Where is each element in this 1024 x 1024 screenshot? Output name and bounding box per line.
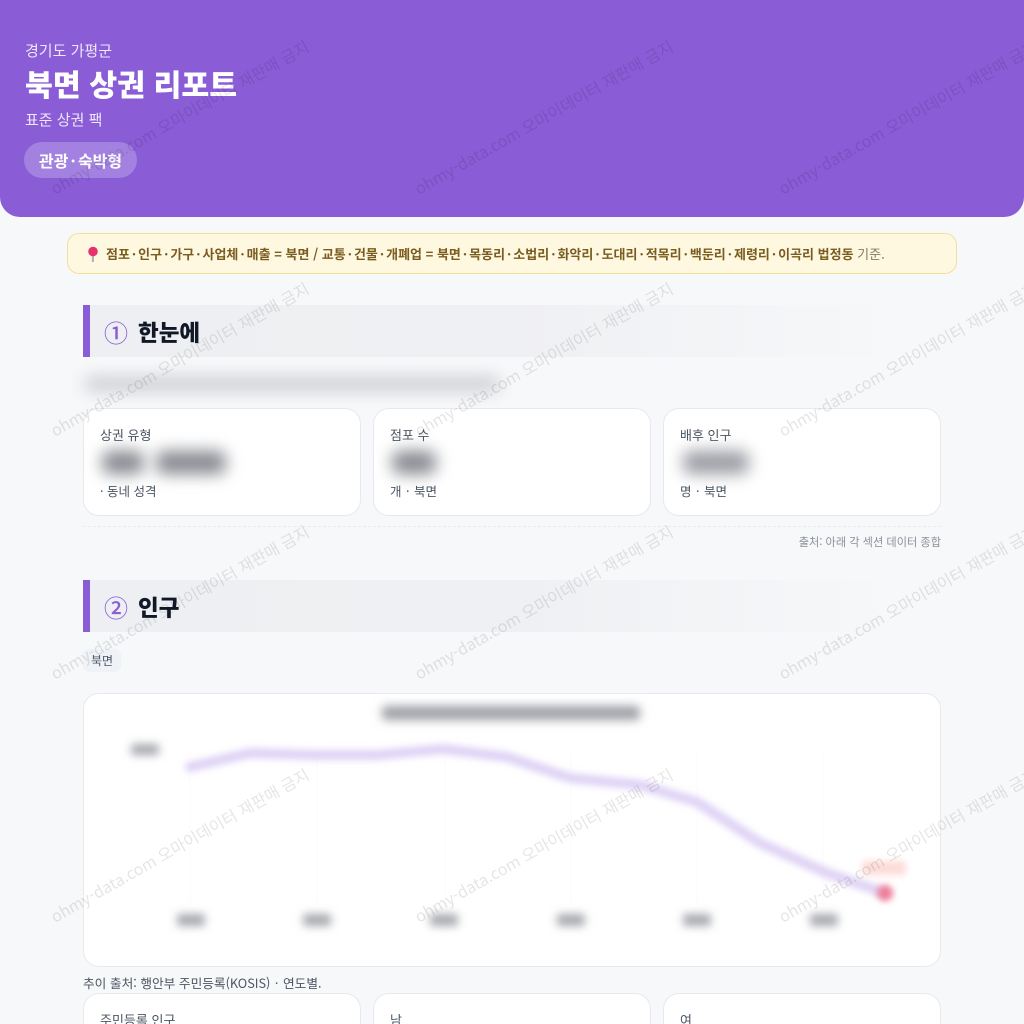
unit: · 동네 성격 bbox=[100, 481, 156, 500]
section number: ① bbox=[104, 314, 128, 349]
area tag: 북면 bbox=[91, 652, 113, 669]
section heading: 한눈에 bbox=[83, 305, 941, 357]
trend line bbox=[190, 749, 885, 893]
category pill: 관광·숙박형 bbox=[39, 148, 122, 172]
area tag bbox=[83, 649, 121, 672]
watermark overlay: ohmy-data.com 오마이데이터 재판매 금지 bbox=[410, 34, 677, 199]
x-axis labels (blurred) bbox=[177, 914, 838, 926]
section title: 인구 bbox=[138, 591, 179, 623]
KPI card: 배후 인구 bbox=[663, 408, 941, 516]
KPI card: 여 bbox=[663, 993, 941, 1024]
label: 상권 유형 bbox=[100, 425, 151, 444]
notice text: 점포·인구·가구·사업체·매출 = 북면 / 교통·건물·개폐업 = 북면·목동리·소법리·화악리·도대리·적목리·백둔리·제령리·이곡리 법정동 기준. bbox=[106, 244, 885, 263]
blurred value bbox=[92, 440, 236, 486]
region label: 경기도 가평군 bbox=[25, 40, 112, 61]
subtitle: 표준 상권 팩 bbox=[25, 109, 102, 130]
chart source: 추이 출처: 행안부 주민등록(KOSIS) · 연도별. bbox=[83, 973, 322, 992]
highlighted end point bbox=[877, 885, 893, 901]
watermark overlay: ohmy-data.com 오마이데이터 재판매 금지 bbox=[410, 762, 677, 927]
KPI card: 남 bbox=[373, 993, 651, 1024]
end point label bbox=[862, 861, 906, 875]
notice box bbox=[67, 233, 957, 274]
watermark overlay: ohmy-data.com 오마이데이터 재판매 금지 bbox=[46, 519, 313, 684]
label: 배후 인구 bbox=[680, 425, 731, 444]
category pill bbox=[24, 142, 137, 178]
watermark overlay: ohmy-data.com 오마이데이터 재판매 금지 bbox=[46, 276, 313, 441]
section title: 한눈에 bbox=[138, 316, 200, 348]
icon: location pin bbox=[88, 246, 98, 262]
blurred value bbox=[392, 451, 436, 474]
blurred summary text bbox=[84, 376, 500, 392]
chart title (blurred) bbox=[382, 706, 640, 720]
KPI card: 주민등록 인구 bbox=[83, 993, 361, 1024]
title: 북면 상권 리포트 bbox=[25, 61, 237, 105]
unit: 명 · 북면 bbox=[680, 481, 727, 500]
y-axis label (blurred) bbox=[131, 744, 159, 755]
blurred value bbox=[683, 451, 749, 474]
unit: 개 · 북면 bbox=[390, 481, 437, 500]
watermark overlay: ohmy-data.com 오마이데이터 재판매 금지 bbox=[46, 762, 313, 927]
section heading: 인구 bbox=[83, 580, 941, 632]
watermark overlay: ohmy-data.com 오마이데이터 재판매 금지 bbox=[410, 276, 677, 441]
line chart bbox=[126, 700, 908, 932]
section number: ② bbox=[104, 589, 128, 624]
source note: 출처: 아래 각 섹션 데이터 종합 bbox=[799, 534, 941, 550]
KPI card: 상권 유형 bbox=[83, 408, 361, 516]
watermark overlay: ohmy-data.com 오마이데이터 재판매 금지 bbox=[410, 519, 677, 684]
header banner bbox=[0, 0, 1024, 217]
line chart card bbox=[83, 693, 941, 967]
label: 점포 수 bbox=[390, 425, 430, 444]
KPI card: 점포 수 bbox=[373, 408, 651, 516]
watermark overlay: ohmy-data.com 오마이데이터 재판매 금지 bbox=[46, 34, 313, 199]
